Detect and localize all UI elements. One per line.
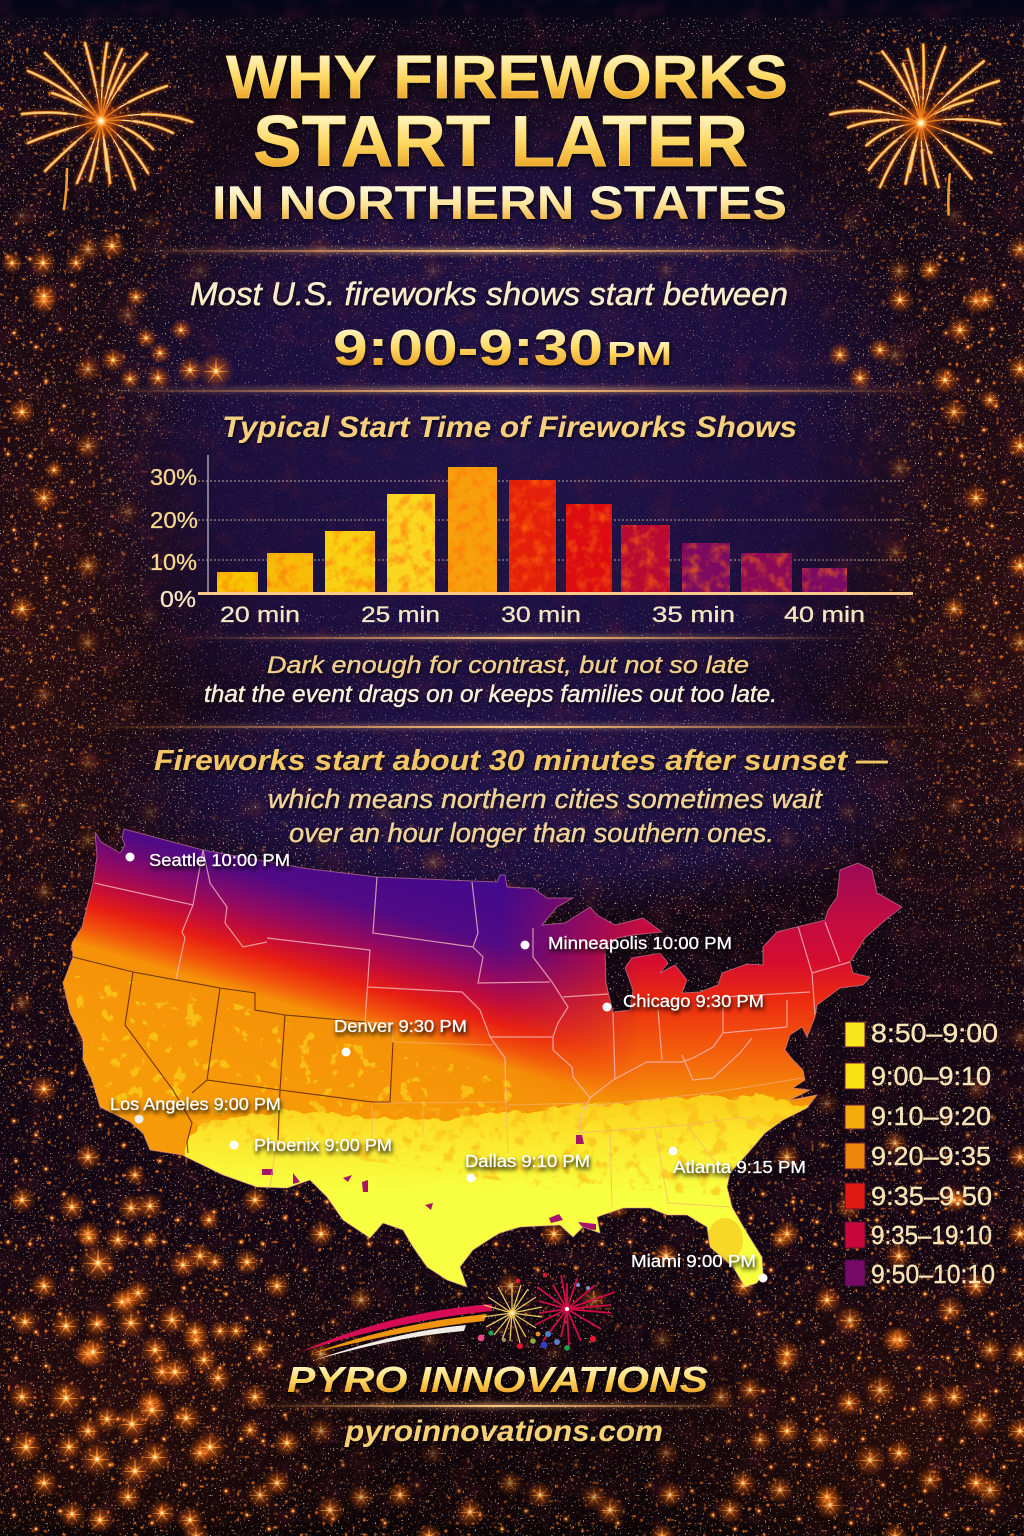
magenta specks <box>227 1135 596 1230</box>
legend item: 8:50–9:00 <box>871 1018 998 1048</box>
firework: top left <box>22 43 192 209</box>
Minneapolis: Minneapolis 10:00 PM <box>548 933 732 953</box>
x axis labels: 20 min <box>220 602 300 627</box>
red burst <box>535 1275 615 1347</box>
Miami: Miami 9:00 PM <box>631 1251 756 1271</box>
Dallas: Dallas 9:10 PM <box>465 1151 590 1171</box>
map introduction: which means northern cities sometimes wait <box>268 784 824 814</box>
time range callout <box>333 319 672 376</box>
Seattle: Seattle 10:00 PM <box>149 850 290 870</box>
divider <box>60 724 960 729</box>
x axis labels: 40 min <box>784 602 865 627</box>
chart caption: that the event drags on or keeps families out too late. <box>204 681 777 708</box>
time range callout: PM <box>607 335 672 372</box>
gold burst <box>482 1283 542 1343</box>
bright stars: left and right columns <box>1 232 1001 480</box>
legend item: 9:20–9:35 <box>871 1141 991 1171</box>
legend item: 9:35–19:10 <box>871 1220 992 1250</box>
legend item: 9:10–9:20 <box>871 1101 991 1131</box>
y axis labels: 0% <box>160 586 196 612</box>
orange blotches in yellow zone <box>190 1095 790 1200</box>
bright stars: bottom left cluster <box>9 1164 301 1534</box>
divider <box>60 387 960 393</box>
state borders: southern dark <box>73 957 393 1153</box>
Chicago: Chicago 9:30 PM <box>623 991 764 1011</box>
divider <box>240 1403 760 1408</box>
bars <box>217 467 847 593</box>
x axis labels: 35 min <box>652 602 735 627</box>
bar chart <box>150 455 913 627</box>
map introduction <box>154 745 889 848</box>
title line 2: START LATER <box>253 102 748 182</box>
confetti dots <box>478 1273 596 1351</box>
legend item: 9:50–10:10 <box>871 1259 995 1289</box>
Los Angeles <box>110 1094 281 1124</box>
chart heading: Typical Start Time of Fireworks Shows <box>222 411 797 444</box>
Los Angeles: Los Angeles 9:00 PM <box>110 1094 281 1114</box>
Denver: Denver 9:30 PM <box>334 1016 467 1036</box>
legend item: 9:00–9:10 <box>871 1061 991 1091</box>
map introduction: Fireworks start about 30 minutes after sunset — <box>154 745 889 777</box>
title line 1: WHY FIREWORKS <box>226 43 788 111</box>
website: pyroinnovations.com <box>344 1415 663 1448</box>
state borders: northern light <box>95 850 850 1133</box>
subheading: Most U.S. fireworks shows start between <box>190 276 788 312</box>
Atlanta <box>668 1146 806 1177</box>
Atlanta: Atlanta 9:15 PM <box>673 1157 806 1177</box>
title <box>212 43 788 229</box>
Dallas <box>465 1151 590 1182</box>
city markers and labels <box>110 850 806 1282</box>
y axis labels: 10% <box>150 549 197 575</box>
yellow blotches in orange zone <box>70 975 520 1115</box>
state borders: southern pale <box>270 1022 803 1207</box>
legend <box>845 1018 998 1289</box>
y axis labels: 30% <box>150 464 197 490</box>
time range callout: 9:00-9:30 <box>333 319 603 376</box>
y axis labels <box>150 464 198 612</box>
divider <box>100 248 880 254</box>
x axis labels: 30 min <box>501 602 581 627</box>
coast outline <box>63 829 902 1287</box>
map introduction: over an hour longer than southern ones. <box>289 818 774 848</box>
title line 3: IN NORTHERN STATES <box>212 176 787 229</box>
chart caption <box>204 652 777 708</box>
divider <box>180 635 860 640</box>
U.S. heat map <box>50 820 920 1300</box>
logo mark <box>300 1273 615 1360</box>
chart caption: Dark enough for contrast, but not so late <box>267 652 749 679</box>
legend item: 9:35–9:50 <box>871 1181 992 1211</box>
y axis labels: 20% <box>150 507 198 533</box>
x axis labels <box>220 602 865 627</box>
bright stars: bottom right and centre <box>246 1190 1005 1527</box>
firework: top right <box>821 36 1008 219</box>
x axis labels: 25 min <box>361 602 440 627</box>
Miami <box>631 1251 768 1282</box>
Denver <box>334 1016 467 1056</box>
brand name: PYRO INNOVATIONS <box>287 1359 708 1400</box>
Florida orange patches <box>707 1218 743 1262</box>
Phoenix: Phoenix 9:00 PM <box>254 1135 392 1155</box>
southern yellow zone <box>182 1096 815 1300</box>
swoosh <box>300 1304 492 1360</box>
